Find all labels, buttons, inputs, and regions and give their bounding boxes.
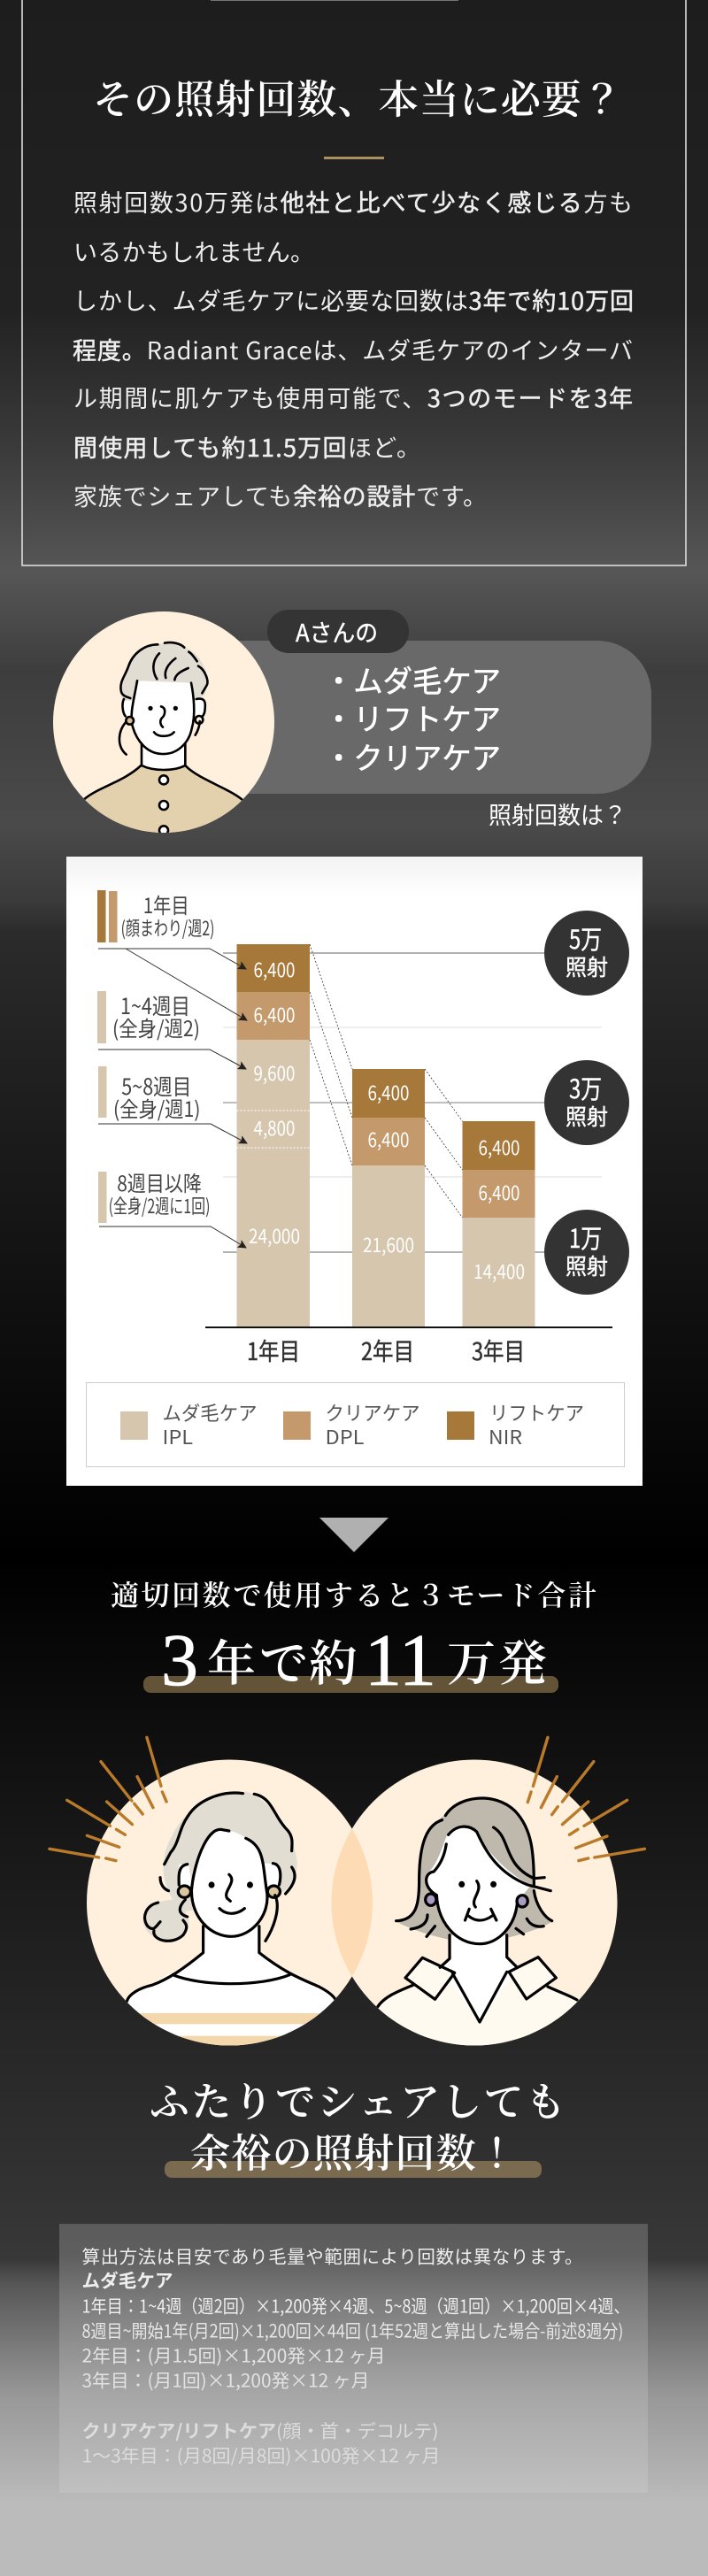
badge: 1万照射 <box>544 1210 629 1295</box>
heading: 3年で約11万発: 約 <box>309 1637 358 1691</box>
portrait: Aさん <box>53 611 274 838</box>
note text: 1年目：1~4週（週2回）×1,200発×4週、5~8週（週1回）×1,200回×4週、 <box>81 2292 630 2318</box>
note text: 算出方法は目安であり毛量や範囲により回数は異なります。 <box>81 2242 582 2269</box>
period label: 8週目以降 <box>98 1166 211 1223</box>
badge: 5万照射 <box>544 911 629 996</box>
intro text block: しかし、ムダ毛ケアに必要な回数は3年で約10万回 <box>73 282 634 317</box>
bar values: 6,400 <box>368 1125 409 1153</box>
closing heading: ふたりでシェアしても <box>150 2080 566 2125</box>
period label: 8週目以降: (全身/2週に1回) <box>109 1191 211 1219</box>
badge: 3万照射: 照射 <box>566 1100 608 1132</box>
badge: 5万照射: 5万 <box>569 919 602 957</box>
portrait: left woman <box>127 1792 335 2048</box>
icon: sparkle rays <box>50 1737 644 1861</box>
year labels: 3年目 <box>472 1333 525 1367</box>
bar values: 21,600 <box>363 1230 414 1258</box>
heading: 3年で約11万発: 発 <box>498 1637 547 1691</box>
care list: ・ムダ毛ケア <box>324 657 501 701</box>
badge: 1万照射: 1万 <box>569 1219 602 1256</box>
period label: 1年目 <box>97 888 214 942</box>
note text: 2年目：(月1.5回)×1,200発×12 ヶ月 <box>81 2341 386 2368</box>
heading: 3年で約11万発: 3 <box>161 1619 198 1702</box>
legend: NIR <box>489 1422 522 1450</box>
bar: year 3 <box>462 1121 535 1326</box>
year labels <box>247 1333 525 1367</box>
panel: stacked bar chart <box>66 857 643 1486</box>
intro text block <box>73 184 634 512</box>
bar values: 14,400 <box>473 1257 525 1285</box>
legend <box>87 1382 625 1467</box>
period label: 5~8週目 <box>98 1066 200 1123</box>
care list <box>324 657 501 778</box>
x axis <box>205 1326 612 1328</box>
Aさんの tag: Aさんの <box>296 614 378 649</box>
bar values: 4,800 <box>253 1113 296 1142</box>
bar values: 6,400 <box>478 1133 520 1161</box>
legend: DPL <box>326 1422 365 1450</box>
question caption: 照射回数は？ <box>489 796 627 831</box>
badge: 1万照射: 照射 <box>566 1250 608 1281</box>
period label: 1年目: (顔まわり/週2) <box>120 913 214 942</box>
intro text block: いるかもしれません。 <box>73 234 314 268</box>
illustration: two women <box>50 1737 644 2048</box>
grid lines <box>223 953 602 1252</box>
bar values: 6,400 <box>368 1078 409 1106</box>
badge: 3万照射: 3万 <box>569 1069 602 1106</box>
care list pill <box>177 641 651 794</box>
intro text block: 程度。Radiant Graceは、ムダ毛ケアのインターバ <box>73 332 633 366</box>
heading: 3年で約11万発: 年 <box>207 1637 256 1691</box>
intro text block: 家族でシェアしても余裕の設計です。 <box>73 478 487 512</box>
note text <box>81 2242 630 2467</box>
legend: クリアケア <box>326 1398 419 1426</box>
intro text block: 間使用しても約11.5万回ほど。 <box>73 429 420 464</box>
year labels: 1年目 <box>247 1333 300 1367</box>
arrow: down triangle <box>319 1518 389 1552</box>
period label: 1年目: 1年目 <box>143 888 189 919</box>
bar: year 1 <box>237 944 310 1326</box>
panel: Aさん profile <box>53 610 651 838</box>
care list: ・リフトケア <box>324 696 501 739</box>
closing heading: 余裕の照射回数！ <box>190 2132 517 2176</box>
bar connectors <box>310 944 462 1218</box>
legend: ムダ毛ケア <box>163 1398 257 1426</box>
period label: 1~4週目 <box>97 989 200 1043</box>
heading: 3年で約11万発: で <box>259 1637 308 1691</box>
panel: calculation note <box>59 2224 648 2493</box>
label arrows <box>98 949 247 1248</box>
subheading: 適切回数で使用すると３モード合計 <box>111 1580 596 1611</box>
note text: 8週目~開始1年(月2回)×1,200回×44回 (1年52週と算出した場合-前述8週分) <box>81 2317 623 2343</box>
bar values <box>249 955 525 1285</box>
note text: クリアケア/リフトケア (顔・首・デコルテ) <box>81 2416 439 2442</box>
bar values: 6,400 <box>253 1000 296 1028</box>
heading: 3年で約11万発 <box>143 1619 558 1702</box>
period label: 8週目以降: 8週目以降 <box>117 1166 202 1197</box>
period label: 1~4週目: (全身/週2) <box>112 1011 200 1042</box>
panel: intro frame <box>22 0 686 565</box>
bar values: 6,400 <box>478 1178 520 1206</box>
Aさんの tag <box>267 610 409 653</box>
note text: ムダ毛ケア <box>81 2265 173 2292</box>
period label: 5~8週目: 5~8週目 <box>121 1070 191 1102</box>
bar values: 9,600 <box>253 1058 296 1087</box>
title: その照射回数、本当に必要？ <box>93 78 622 122</box>
period label: 1~4週目: 1~4週目 <box>120 989 190 1021</box>
closing heading <box>150 2080 566 2178</box>
bar values: 24,000 <box>249 1221 300 1250</box>
bar values: 6,400 <box>253 955 296 983</box>
note text: 3年目：(月1回)×1,200発×12 ヶ月 <box>81 2366 369 2393</box>
heading: 3年で約11万発: 11 <box>365 1619 436 1702</box>
title divider <box>324 157 384 159</box>
bar: year 2 <box>352 1069 425 1326</box>
badge: 3万照射 <box>544 1060 629 1145</box>
legend: IPL <box>163 1422 193 1450</box>
heading: 3年で約11万発: 万 <box>447 1637 496 1691</box>
intro text block: ル期間に肌ケアも使用可能で、3つのモードを3年 <box>73 380 633 414</box>
badge: 5万照射: 照射 <box>566 950 608 982</box>
care list: ・クリアケア <box>324 734 501 778</box>
note text: 1〜3年目：(月8回/月8回)×100発×12 ヶ月 <box>81 2441 441 2467</box>
year labels: 2年目 <box>361 1333 414 1367</box>
portrait: right woman <box>377 1798 578 2047</box>
legend: リフトケア <box>489 1398 584 1426</box>
intro text block: 照射回数30万発は他社と比べて少なく感じる方も <box>73 184 633 219</box>
period label: 5~8週目: (全身/週1) <box>113 1092 200 1123</box>
